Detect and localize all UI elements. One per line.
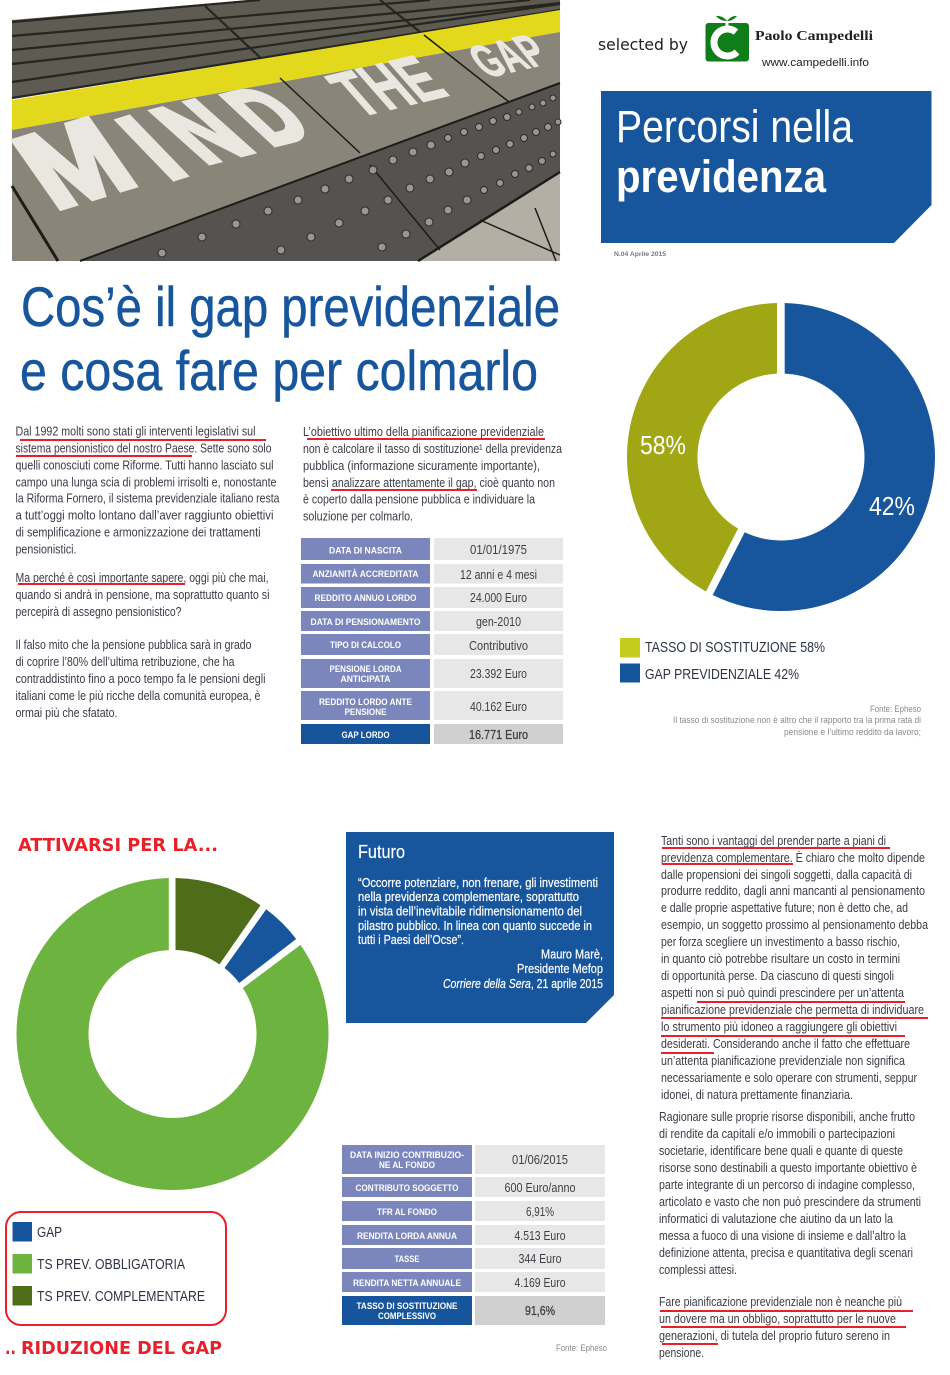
source note <box>673 704 921 737</box>
table: gap calculation: gen-2010 <box>476 615 521 629</box>
text block: intro column: di coprire l’80% dell’ultima retribuzione, che ha <box>16 655 235 669</box>
text block: fare pianificazione: un dovere ma un obbligo, soprattutto per le nuove <box>659 1312 896 1326</box>
photo: mind the gap platform: I <box>97 99 208 198</box>
underlines: fare pianificazione <box>660 1311 913 1344</box>
table: gap calculation: TIPO DI CALCOLO <box>330 640 401 651</box>
legend: donut chart: TASSO DI SOSTITUZIONE 58% <box>645 639 825 656</box>
text block: risorse: informatici di valutazione che aiutino da un lato la <box>659 1212 893 1226</box>
text block: intro column: pensionistici. <box>16 542 76 556</box>
text block: vantaggi: di opportunità perse. Da ciascuno di questi singoli <box>661 969 894 983</box>
text block: objective column: bensì analizzare attentamente il gap, cioè quanto non <box>303 476 555 490</box>
donut chart: riduzione del gap <box>16 878 328 1190</box>
heading: riduzione del gap: RIDUZIONE DEL GAP <box>21 1339 222 1359</box>
table: complementary pension: CONTRIBUTO SOGGETTO <box>356 1183 458 1194</box>
table: gap calculation: DATA DI NASCITA <box>329 546 402 556</box>
text block: vantaggi: un’attenta pianificazione previdenziale non significa <box>661 1054 905 1068</box>
table: gap calculation: 16.771 Euro <box>469 728 528 742</box>
text block: vantaggi: per forza scegliere un investimento a basso rischio, <box>661 935 900 949</box>
logo: selected by Paolo Campedelli <box>598 16 873 69</box>
panel: percorsi nella previdenza <box>601 91 932 243</box>
table: gap calculation: ANTICIPATA <box>340 674 391 685</box>
panel: percorsi nella previdenza: previdenza <box>616 151 827 202</box>
table: complementary pension: COMPLESSIVO <box>378 1311 436 1322</box>
text block: risorse: societarie, identificare bene quali e quante di queste <box>659 1144 903 1158</box>
table: gap calculation: REDDITO LORDO ANTE <box>319 697 412 708</box>
panel: futuro quote: Futuro <box>358 842 405 862</box>
table: complementary pension: RENDITA LORDA ANNUA <box>357 1231 457 1242</box>
text block: objective column: non è calcolare il tasso di sostituzione¹ della previdenza <box>303 442 562 456</box>
photo: mind the gap platform: D <box>201 70 333 161</box>
title: Cos’è il gap previdenziale <box>21 275 560 338</box>
source note: epheso: Fonte: Epheso <box>556 1343 607 1353</box>
text block: vantaggi: aspetti non si può quindi prescindere per un’attenta <box>661 986 904 1000</box>
panel: futuro quote: pilastro pubblico. In linea con quanto succede in <box>358 919 592 933</box>
panel: futuro quote: in vista dell’inevitabile ridimensionamento del <box>358 904 582 918</box>
table: gap calculation: Contributivo <box>469 639 528 653</box>
text block: intro column: italiani come le più ricche della comunità europea, è <box>16 689 261 703</box>
table: complementary pension: 344 Euro <box>518 1252 562 1266</box>
panel: futuro quote: “Occorre potenziare, non frenare, gli investimenti <box>358 876 598 890</box>
text block: risorse: di rendite da capitali e/o immobili o partecipazioni <box>659 1127 895 1141</box>
panel: futuro quote: Mauro Marè, <box>541 948 603 962</box>
legend: riduzione del gap <box>6 1212 226 1325</box>
logo: selected by Paolo Campedelli: www.campedelli.info <box>761 57 869 69</box>
legend: riduzione del gap: TS PREV. COMPLEMENTARE <box>37 1288 205 1305</box>
text block: vantaggi: desiderati. Considerando anche il fatto che effettuare <box>661 1037 910 1051</box>
text block: intro column: campo una lunga scia di problemi irrisolti e, nonostante <box>16 476 277 490</box>
donut chart: tasso di sostituzione e gap: 58% <box>640 430 686 460</box>
table: complementary pension: 4.169 Euro <box>514 1276 566 1290</box>
table: complementary pension: NE AL FONDO <box>379 1160 435 1171</box>
legend: donut chart <box>620 638 825 683</box>
table: complementary pension: TFR AL FONDO <box>377 1207 437 1218</box>
panel: futuro quote: nella previdenza complementare, soprattutto <box>358 890 579 904</box>
text block: risorse: complessi attesi. <box>659 1263 737 1277</box>
issue date: N.04 Aprile 2015 <box>614 251 666 258</box>
donut chart: tasso di sostituzione e gap: 42% <box>869 491 915 521</box>
text block: vantaggi: dalle propensioni dei singoli soggetti, dalla capacità di <box>661 868 912 882</box>
text block: intro column: a tutt’oggi molto lontano dall’aver raggiunto obiettivi <box>16 508 274 522</box>
text block: objective column: soluzione per colmarlo. <box>303 510 413 524</box>
panel: futuro quote: Presidente Mefop <box>517 962 603 976</box>
text block: vantaggi: Tanti sono i vantaggi del prender parte a piani di <box>661 834 886 848</box>
text block: risorse <box>659 1110 921 1277</box>
table: gap calculation: REDDITO ANNUO LORDO <box>314 593 416 604</box>
panel: futuro quote <box>346 832 614 1023</box>
legend: riduzione del gap: TS PREV. OBBLIGATORIA <box>37 1256 185 1273</box>
text block: vantaggi: in quanto ciò potrebbe risultare un costo in termini <box>661 952 900 966</box>
text block: fare pianificazione: generazioni, di tutela del proprio futuro sereno in <box>659 1329 890 1343</box>
photo: mind the gap platform <box>0 0 561 261</box>
text block: fare pianificazione: Fare pianificazione previdenziale non è neanche più <box>659 1295 902 1309</box>
text block: objective column <box>303 425 562 524</box>
table: gap calculation: ANZIANITÀ ACCREDITATA <box>312 569 419 580</box>
table: complementary pension: 4.513 Euro <box>514 1229 566 1243</box>
title <box>20 275 560 402</box>
underlines: intro column <box>16 440 266 584</box>
logo: selected by Paolo Campedelli: selected by <box>598 35 688 54</box>
legend: riduzione del gap: GAP <box>37 1224 62 1241</box>
title: e cosa fare per colmarlo <box>20 339 538 402</box>
text block: objective column: L’obiettivo ultimo della pianificazione previdenziale <box>303 425 544 439</box>
table: complementary pension: 01/06/2015 <box>512 1153 568 1167</box>
table: gap calculation: PENSIONE LORDA <box>330 664 402 675</box>
source note: pensione e l’ultimo reddito da lavoro; <box>784 727 921 737</box>
table: gap calculation: 12 anni e 4 mesi <box>460 568 537 582</box>
table: complementary pension: TASSE <box>394 1254 420 1265</box>
text block: vantaggi <box>661 834 928 1102</box>
panel: percorsi nella previdenza: Percorsi nella <box>616 101 854 152</box>
logo: selected by Paolo Campedelli: Paolo Campedelli <box>755 28 873 43</box>
text block: vantaggi: e dalle proprie aspettative future; non è detto che, ad <box>661 901 908 915</box>
text block: intro column: Dal 1992 molti sono stati gli interventi legislativi sul <box>16 424 256 438</box>
text block: intro column: percepirà di assegno pensionistico? <box>16 605 182 619</box>
heading: riduzione del gap: .. <box>5 1339 16 1359</box>
panel: futuro quote: Corriere della Sera, 21 aprile 2015 <box>443 977 603 991</box>
panel: futuro quote: tutti i Paesi dell’Ocse”. <box>358 933 464 947</box>
legend: donut chart: GAP PREVIDENZIALE 42% <box>645 666 799 683</box>
photo: mind the gap platform: N <box>130 84 276 180</box>
text block: objective column: pubblica (informazione sicuramente importante), <box>303 459 540 473</box>
text block: risorse: messa a fuoco di una visione di insieme e dall’altro la <box>659 1229 906 1243</box>
text block: intro column: Ma perché è così importante sapere, oggi più che mai, <box>16 571 268 585</box>
table: gap calculation <box>301 538 563 744</box>
text block: intro column: sistema pensionistico del nostro Paese. Sette sono solo <box>16 442 272 456</box>
underlines: vantaggi <box>661 848 928 1053</box>
text block: vantaggi: idonei, di natura prettamente finanziaria. <box>661 1088 853 1102</box>
text block: vantaggi: lo strumento più idoneo a raggiungere gli obiettivi <box>661 1020 897 1034</box>
heading: attivarsi per la: ATTIVARSI PER LA... <box>18 836 218 856</box>
text block: intro column: Il falso mito che la pensione pubblica sarà in grado <box>16 638 252 652</box>
table: gap calculation: 23.392 Euro <box>470 667 527 681</box>
text block: fare pianificazione <box>659 1295 902 1360</box>
table: complementary pension <box>342 1145 605 1325</box>
table: complementary pension: RENDITA NETTA ANNUALE <box>353 1278 461 1289</box>
text block: intro column: contraddistinto fino a poco tempo fa le pensioni degli <box>16 672 266 686</box>
text block: intro column: quelli conosciuti come Riforme. Tutti hanno lasciato sul <box>16 458 274 472</box>
table: gap calculation: PENSIONE <box>344 707 386 718</box>
text block: intro column: ormai più che sfatato. <box>16 706 118 720</box>
table: complementary pension: TASSO DI SOSTITUZIONE <box>356 1301 458 1312</box>
source note: Fonte: Epheso <box>870 704 921 714</box>
photo: mind the gap platform: THE <box>313 42 462 130</box>
table: complementary pension: DATA INIZIO CONTRIBUZIO- <box>350 1150 464 1161</box>
text block: fare pianificazione: pensione. <box>659 1346 704 1360</box>
text block: objective column: è coperto dalla pensione pubblica e individuare la <box>303 492 535 506</box>
table: complementary pension: 600 Euro/anno <box>504 1181 576 1195</box>
donut chart: tasso di sostituzione e gap <box>627 303 935 611</box>
source note: Il tasso di sostituzione non è altro che il rapporto tra la prima rata di <box>673 715 921 725</box>
table: gap calculation: 01/01/1975 <box>470 543 527 557</box>
table: gap calculation: GAP LORDO <box>342 730 390 741</box>
text block: intro column <box>16 424 280 720</box>
table: gap calculation: DATA DI PENSIONAMENTO <box>310 617 420 628</box>
table: gap calculation: 24.000 Euro <box>470 591 527 605</box>
table: gap calculation: 40.162 Euro <box>470 700 527 714</box>
photo: mind the gap platform: GAP <box>458 26 560 88</box>
text block: intro column: quando si andrà in pensione, ma soprattutto quanto si <box>16 588 270 602</box>
table: complementary pension: 6,91% <box>526 1205 554 1219</box>
table: complementary pension: 91,6% <box>525 1304 555 1318</box>
underlines: objective column <box>307 439 545 490</box>
text block: intro column: la Riforma Fornero, il sistema previdenziale italiano resta <box>16 492 280 506</box>
text block: intro column: di semplificazione e armonizzazione dei trattamenti <box>16 526 260 540</box>
